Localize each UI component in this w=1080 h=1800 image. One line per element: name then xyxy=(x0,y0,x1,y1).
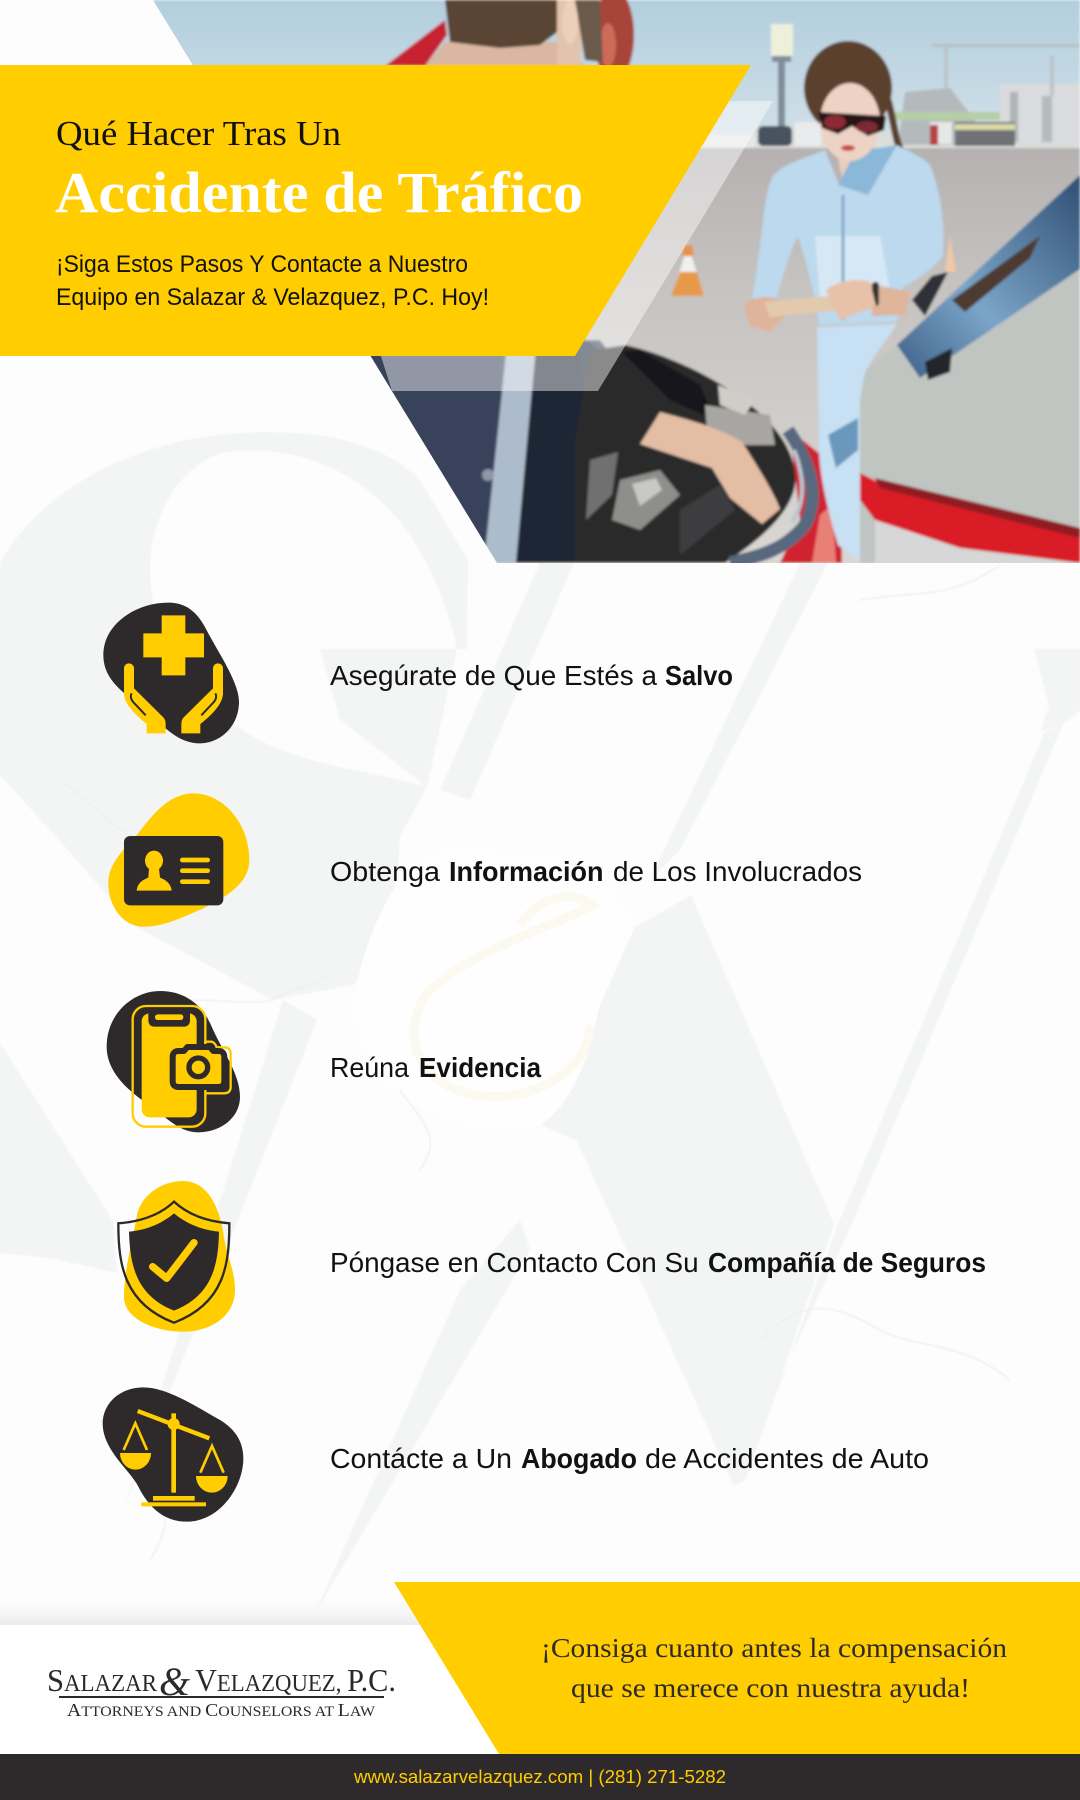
woman xyxy=(744,41,943,563)
main title: Accidente de Tráfico xyxy=(55,160,583,225)
step text: Obtenga xyxy=(330,856,441,887)
step 1 xyxy=(103,603,733,743)
footer logo panel xyxy=(0,1595,520,1755)
silver car with windshield and taillight xyxy=(860,175,1080,563)
logo: Salazar & Velazquez: ATTORNEYS AND COUNSELORS AT LAW xyxy=(67,1700,375,1720)
step text xyxy=(330,1443,929,1474)
step 3 xyxy=(107,991,542,1132)
footer call to action xyxy=(394,1582,1080,1754)
icon: scales of justice xyxy=(103,1387,243,1522)
step text: Asegúrate de Que Estés a xyxy=(330,660,658,691)
step text xyxy=(330,1247,986,1278)
step text xyxy=(330,856,862,887)
step text: Evidencia xyxy=(419,1052,542,1083)
contact bar: www.salazarvelazquez.com | (281) 271-5282 xyxy=(353,1767,726,1787)
call to action text: ¡Consiga cuanto antes la compensación xyxy=(541,1633,1008,1663)
subtitle line: Qué Hacer Tras Un: Qué Hacer Tras Un xyxy=(56,114,341,153)
step text: Reúna xyxy=(330,1052,410,1083)
marble veins xyxy=(60,565,1010,1560)
logo: Salazar & Velazquez: SALAZAR xyxy=(47,1662,157,1698)
red car bumper xyxy=(730,430,842,563)
man head and mirror xyxy=(384,0,636,65)
step text: Abogado xyxy=(521,1443,637,1474)
icon: ID card xyxy=(108,793,249,927)
step text: Contácte a Un xyxy=(330,1443,512,1474)
monogram watermark xyxy=(0,432,1080,1610)
step text: Información xyxy=(449,856,604,887)
call to action text: que se merece con nuestra ayuda! xyxy=(571,1673,970,1703)
man body xyxy=(370,338,606,563)
step 5 xyxy=(103,1387,929,1522)
sky and road xyxy=(150,0,1080,565)
step text: de Accidentes de Auto xyxy=(645,1443,929,1474)
step text: de Los Involucrados xyxy=(613,856,862,887)
icon: shield with check xyxy=(118,1181,235,1332)
logo: Salazar & Velazquez xyxy=(47,1659,396,1720)
header banner xyxy=(0,65,751,356)
contact bar xyxy=(0,1754,1080,1800)
step text: Póngase en Contacto Con Su xyxy=(330,1247,699,1278)
cones xyxy=(671,235,956,296)
step text: Compañía de Seguros xyxy=(708,1247,986,1278)
step text xyxy=(330,1052,542,1083)
header photo: roadside accident xyxy=(150,0,1080,565)
icon: hands holding medical cross xyxy=(103,603,239,743)
icon: phone with camera xyxy=(107,991,240,1132)
hand xyxy=(640,412,780,524)
logo: Salazar & Velazquez: VELAZQUEZ, P.C. xyxy=(195,1662,396,1698)
ampersand halo xyxy=(355,850,634,1128)
step 2 xyxy=(108,793,862,927)
call to action text xyxy=(541,1633,1008,1703)
translucent accent parallelogram xyxy=(300,101,773,391)
engine bay xyxy=(575,345,796,563)
step text: Salvo xyxy=(665,660,733,691)
logo: Salazar & Velazquez: & xyxy=(159,1659,190,1704)
distant city xyxy=(746,22,1080,148)
intro text: Equipo en Salazar & Velazquez, P.C. Hoy! xyxy=(56,284,489,311)
step 4 xyxy=(118,1181,986,1332)
intro text xyxy=(56,251,489,311)
intro text: ¡Siga Estos Pasos Y Contacte a Nuestro xyxy=(56,251,468,278)
